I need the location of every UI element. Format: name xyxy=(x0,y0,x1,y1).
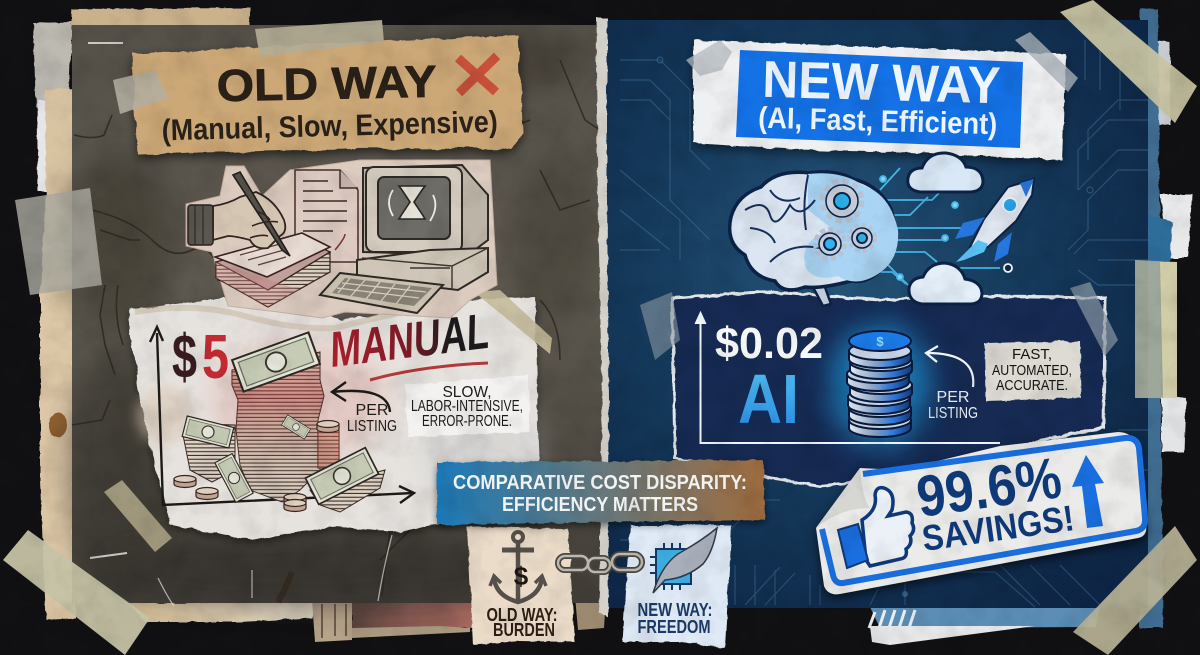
staples xyxy=(88,40,1132,558)
arrow to money stack xyxy=(332,382,390,412)
paper scraps: bottom xyxy=(128,596,1100,645)
panel: old way background xyxy=(65,25,604,606)
note: slow labor-intensive error-prone: SLOW, xyxy=(442,384,492,401)
price: $5: 5 xyxy=(202,323,229,392)
icon: anchor with dollar xyxy=(490,532,546,602)
chart axes xyxy=(157,333,413,505)
panel: manual cost chart paper xyxy=(128,290,552,540)
label: per listing: PER xyxy=(356,402,388,419)
dollar on anchor: $ xyxy=(514,561,529,591)
heading: new way: NEW WAY xyxy=(762,51,1001,115)
icon: feather xyxy=(653,528,717,593)
panel: new way background xyxy=(606,20,1148,608)
illustration: ai brain, cloud, rocket xyxy=(730,153,1034,306)
icon: brain xyxy=(730,172,898,306)
label: old way burden: OLD WAY: xyxy=(486,605,558,625)
icon: red x xyxy=(458,56,497,93)
chart axes xyxy=(700,313,1000,443)
icon: rocket xyxy=(955,179,1034,262)
tape xyxy=(474,290,552,354)
main bill stack xyxy=(232,332,324,502)
label: ai: AI xyxy=(738,360,799,438)
loose coins xyxy=(174,476,306,512)
icon: chain link xyxy=(558,554,642,572)
icon: coin stack xyxy=(847,331,912,437)
icon: cloud top xyxy=(908,153,983,192)
heading: old way: OLD WAY xyxy=(216,56,437,111)
subheading: ai fast efficient: (AI, Fast, Efficient) xyxy=(758,102,998,141)
icon: crt computer xyxy=(320,165,488,313)
label: new way freedom: NEW WAY: xyxy=(638,600,712,620)
freedom note xyxy=(622,525,732,648)
icon: up arrow xyxy=(1072,455,1104,528)
note: fast automated accurate: ACCURATE. xyxy=(996,377,1068,394)
banner: comparative cost disparity xyxy=(437,460,765,525)
note: fast automated accurate: AUTOMATED, xyxy=(992,362,1072,379)
icon: thumbs up xyxy=(838,488,914,568)
icon: hand with pen xyxy=(188,172,290,256)
circuit lines xyxy=(872,168,1012,285)
old way title label xyxy=(113,20,523,154)
icon: chip xyxy=(650,543,691,590)
price: $5: $ xyxy=(172,323,197,392)
label: savings: SAVINGS! xyxy=(919,497,1077,559)
stat: 99.6%: 99.6% xyxy=(913,445,1065,530)
icon: coin stack: $ xyxy=(876,334,884,349)
note: fast automated accurate xyxy=(985,341,1081,401)
icon: document xyxy=(295,170,358,262)
icon: paper stack xyxy=(215,233,330,307)
small curled bill xyxy=(281,415,311,439)
paper scraps: left edge xyxy=(33,8,250,620)
curled bill xyxy=(215,454,253,502)
price: $5 xyxy=(172,323,229,392)
banner: comparative cost disparity: EFFICIENCY MATTERS xyxy=(502,494,698,516)
new way title label xyxy=(686,32,1078,160)
arrow to coins xyxy=(926,346,973,387)
icon: cloud bottom xyxy=(909,263,982,304)
paper scraps: right edge xyxy=(1140,8,1192,628)
burden note xyxy=(467,527,575,645)
heading: manual: MANUAL xyxy=(327,303,492,378)
label: per listing: LISTING xyxy=(928,405,978,422)
subheading: manual slow expensive: (Manual, Slow, Expensive) xyxy=(161,106,498,147)
money pile xyxy=(174,332,385,512)
note: slow labor-intensive error-prone: ERROR-PRONE. xyxy=(422,413,512,430)
savings sticker xyxy=(816,432,1146,594)
banner: comparative cost disparity: COMPARATIVE COST DISPARITY: xyxy=(453,472,747,494)
illustration: hand writing and old computer xyxy=(186,160,497,318)
note: slow labor-intensive error-prone: LABOR-INTENSIVE, xyxy=(411,398,523,415)
coin stack xyxy=(317,420,339,468)
label: old way burden: BURDEN xyxy=(493,620,555,640)
right bill pile xyxy=(305,448,385,512)
centre torn paper seam xyxy=(596,18,609,618)
underline stroke xyxy=(370,363,488,380)
label: new way freedom: FREEDOM xyxy=(638,617,710,637)
price: $0.02: $0.02 xyxy=(715,319,823,368)
label: per listing: LISTING xyxy=(347,418,397,435)
left bill stack xyxy=(182,416,235,482)
panel: ai cost chart xyxy=(640,282,1118,486)
note: slow labor-intensive error-prone xyxy=(405,375,530,437)
note: fast automated accurate: FAST, xyxy=(1012,346,1052,363)
label: per listing: PER xyxy=(937,389,969,406)
icon: gears xyxy=(816,182,874,258)
